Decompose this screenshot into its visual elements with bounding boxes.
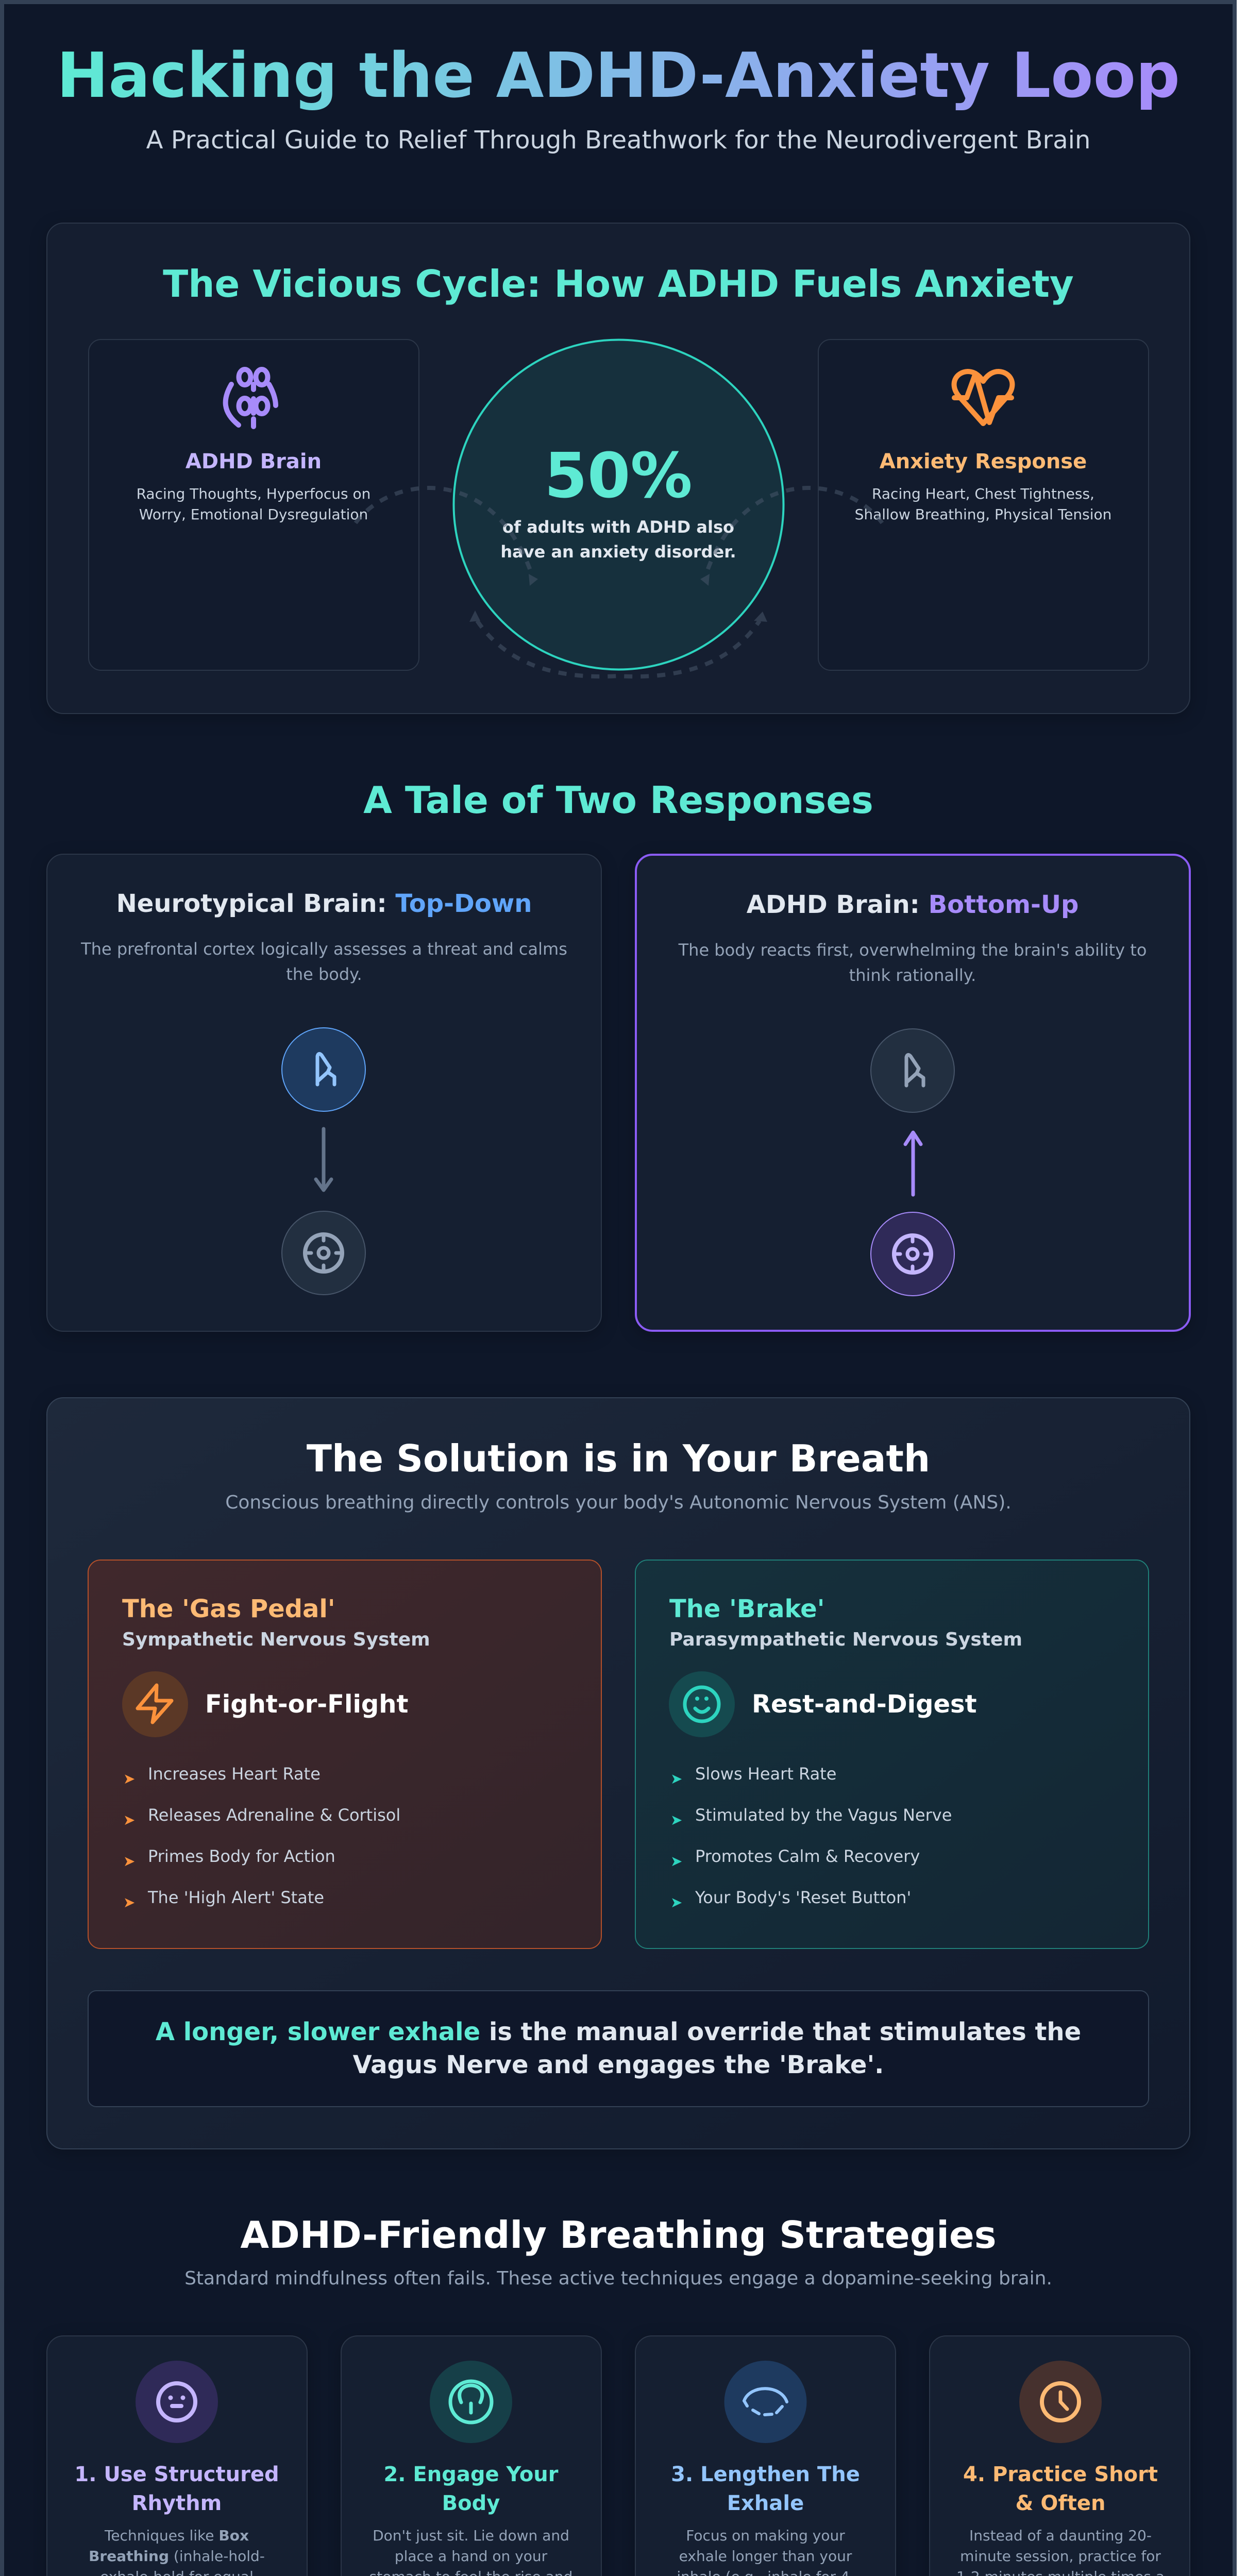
list: gas pedal effects: Increases Heart Rate [148, 1764, 321, 1784]
card: brake [635, 1560, 1149, 1948]
label: ADHD brain: ADHD Brain [186, 450, 322, 473]
strategy text: place a hand on your [395, 2548, 548, 2565]
strategy text: Instead of a daunting 20- [969, 2527, 1152, 2544]
card: strategy 3 [635, 2336, 896, 2576]
icon: breath arc [724, 2361, 807, 2443]
heading: breathing strategies: ADHD-Friendly Breathing Strategies [240, 2213, 997, 2257]
strategy text: minute session, practice for [960, 2548, 1161, 2565]
list: gas pedal effects: ➤ [123, 1811, 135, 1828]
card title: brake: The 'Brake' [669, 1595, 824, 1623]
icon: body anchor [430, 2361, 512, 2443]
icon: clock [1019, 2361, 1102, 2443]
strategy title: 2. Engage Your [383, 2463, 559, 2486]
title: Hacking the ADHD-Anxiety Loop [57, 40, 1180, 112]
strategy text: Breathing (inhale-hold- [89, 2548, 265, 2565]
callout: longer exhale: Vagus Nerve and engages the 'Brake'. [353, 2050, 884, 2079]
description: ADHD brain: Racing Thoughts, Hyperfocus on [137, 485, 370, 502]
strategy text: Don't just sit. Lie down and [373, 2527, 569, 2544]
card subtitle: sympathetic: Sympathetic Nervous System [122, 1629, 430, 1650]
panel: neurotypical brain [47, 854, 601, 1331]
icon: lightning bolt [122, 1671, 188, 1737]
callout: longer exhale [88, 1991, 1149, 2107]
strategy title: Exhale [727, 2492, 804, 2515]
statistic caption: of adults with ADHD also [502, 517, 734, 537]
list: brake effects: ➤ [670, 1894, 682, 1911]
list: gas pedal effects: ➤ [123, 1894, 135, 1911]
list: gas pedal effects: ➤ [123, 1770, 135, 1787]
list: gas pedal effects: Releases Adrenaline & Cortisol [148, 1805, 400, 1825]
card: ADHD brain [89, 340, 419, 670]
panel description: the body. [286, 964, 362, 984]
strategy title: Rhythm [132, 2492, 222, 2515]
panel description: The body reacts first, overwhelming the brain's ability to [678, 940, 1147, 960]
subheading: the solution: Conscious breathing directly controls your body's Autonomic Nervous System (ANS). [225, 1492, 1012, 1513]
description: anxiety response: Shallow Breathing, Physical Tension [855, 506, 1111, 523]
list: brake effects: ➤ [670, 1811, 682, 1828]
label: anxiety response: Anxiety Response [880, 450, 1087, 473]
strategy text: exhale longer than your [679, 2548, 852, 2565]
icon: smiling face [669, 1671, 735, 1737]
strategy title: & Often [1016, 2492, 1105, 2515]
icon: brain [226, 369, 276, 427]
icon: body node active [871, 1212, 954, 1296]
list: gas pedal effects [123, 1764, 400, 1911]
list: brake effects: Your Body's 'Reset Button' [695, 1888, 911, 1907]
panel: ADHD brain bottom-up [636, 855, 1190, 1331]
card: anxiety response [818, 340, 1149, 670]
heading: a tale of two responses: A Tale of Two Responses [363, 778, 873, 822]
label: rest-and-digest: Rest-and-Digest [752, 1690, 977, 1719]
strategy title: 3. Lengthen The [671, 2463, 860, 2486]
panel description: think rationally. [849, 965, 976, 985]
icon: heart with pulse [954, 371, 1012, 423]
list: brake effects: ➤ [670, 1853, 682, 1870]
list: brake effects: Slows Heart Rate [695, 1764, 836, 1784]
list: gas pedal effects: ➤ [123, 1853, 135, 1870]
subtitle: A Practical Guide to Relief Through Breathwork for the Neurodivergent Brain [146, 126, 1090, 155]
description: anxiety response: Racing Heart, Chest Tightness, [872, 485, 1094, 502]
heading: the solution: The Solution is in Your Breath [307, 1437, 930, 1480]
callout: longer exhale: A longer, slower exhale is the manual override that stimulates the [156, 2018, 1081, 2046]
list: gas pedal effects: Primes Body for Action [148, 1846, 335, 1866]
card: gas pedal [88, 1560, 601, 1948]
list: brake effects [670, 1764, 952, 1911]
icon: brain node muted [871, 1029, 954, 1112]
strategy text: Focus on making your [686, 2527, 845, 2544]
card title: gas pedal: The 'Gas Pedal' [122, 1595, 335, 1623]
panel title: Neurotypical Brain: Top-Down [116, 889, 532, 918]
strategy title: 4. Practice Short [963, 2463, 1158, 2486]
icon: neutral face [136, 2361, 218, 2443]
arrows: cycle loop [356, 488, 882, 676]
strategy title: Body [442, 2492, 500, 2515]
statistic caption: have an anxiety disorder. [500, 542, 736, 562]
card: strategy 1 [47, 2336, 307, 2576]
list: brake effects: Stimulated by the Vagus Nerve [695, 1805, 952, 1825]
label: fight-or-flight: Fight-or-Flight [205, 1690, 408, 1719]
panel: the solution is in your breath [47, 1398, 1190, 2149]
strategy title: 1. Use Structured [74, 2463, 279, 2486]
heading: vicious cycle: The Vicious Cycle: How ADHD Fuels Anxiety [163, 262, 1074, 306]
panel title: ADHD Brain: Bottom-Up [747, 890, 1079, 919]
strategy text: Techniques like Box [105, 2527, 249, 2544]
card: strategy 4 [930, 2336, 1190, 2576]
icon: brain node active [282, 1028, 365, 1111]
card subtitle: parasympathetic: Parasympathetic Nervous System [669, 1629, 1022, 1650]
statistic: 50%: 50% [544, 440, 693, 512]
icon: body node muted [282, 1211, 365, 1295]
card: strategy 2 [341, 2336, 601, 2576]
description: ADHD brain: Worry, Emotional Dysregulation [139, 506, 368, 523]
panel description: The prefrontal cortex logically assesses a threat and calms [80, 939, 567, 959]
arrow: down [316, 1129, 331, 1190]
subheading: breathing strategies: Standard mindfulness often fails. These active techniques engage a dopamine-seeking brain. [184, 2268, 1052, 2289]
list: brake effects: ➤ [670, 1770, 682, 1787]
list: brake effects: Promotes Calm & Recovery [695, 1846, 920, 1866]
panel: the vicious cycle [47, 223, 1190, 714]
list: gas pedal effects: The 'High Alert' State [147, 1888, 324, 1907]
arrow: up [905, 1132, 921, 1195]
central statistic circle [453, 340, 783, 670]
